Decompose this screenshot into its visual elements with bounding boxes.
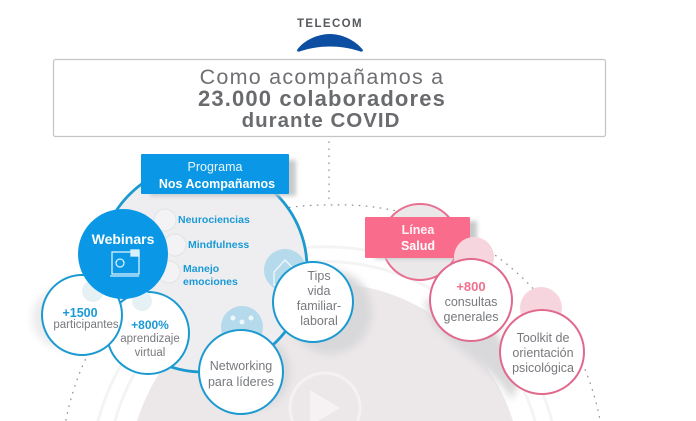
bubble: +800 consultas generales: +800	[456, 279, 486, 294]
title box: 23.000 colaboradores	[198, 86, 446, 111]
bubble: +1500 participantes: +1500	[62, 306, 98, 320]
title box	[54, 60, 606, 136]
bubble: +800% aprendizaje virtual	[107, 291, 189, 374]
bubble: Tips vida familiar-laboral: Tips	[307, 269, 331, 283]
bubble: +800% aprendizaje virtual: virtual	[135, 347, 165, 359]
header: Nos Acompañamos	[159, 177, 275, 191]
topic labels: Manejo	[183, 263, 219, 275]
background: dotted outer arc and connector	[66, 142, 600, 420]
topic labels: Neurociencias	[178, 214, 250, 226]
header shadow	[375, 221, 477, 259]
bubble: Toolkit de orientación psicológica: Toolkit de	[517, 331, 569, 345]
bubble: Tips vida familiar-laboral: familiar-	[297, 299, 341, 313]
bubble: Webinars: Webinars	[92, 231, 155, 247]
background: stippled semicircle	[137, 283, 513, 421]
bubble: +800% aprendizaje virtual: aprendizaje	[120, 333, 180, 345]
header	[141, 154, 289, 194]
background: faint rings and left shading	[32, 247, 552, 421]
bubble: Toolkit de orientación psicológica: psicológica	[512, 361, 574, 375]
header: Salud	[401, 239, 435, 253]
bubble: Tips vida familiar-laboral	[264, 249, 353, 342]
bubble: +1500 participantes: participantes	[53, 319, 119, 331]
header	[365, 217, 470, 258]
bubble: +800 consultas generales	[430, 237, 512, 341]
telecom logo	[297, 18, 363, 52]
header: Línea	[402, 223, 435, 237]
bubble: Toolkit de orientación psicológica	[500, 287, 584, 394]
shadow band behind bubbles	[425, 300, 520, 400]
bubble: +800 consultas generales: generales	[444, 310, 498, 324]
bubble: Toolkit de orientación psicológica: orientación	[512, 346, 574, 360]
topic labels: Mindfulness	[188, 239, 249, 251]
topic icons	[154, 209, 186, 283]
bubble: +800 consultas generales: consultas	[445, 295, 497, 309]
panel: Línea Salud	[365, 204, 584, 400]
bubble: +1500 participantes	[42, 275, 122, 355]
topic labels	[178, 214, 250, 288]
title box: durante COVID	[242, 109, 400, 132]
bubble: Webinars	[78, 209, 168, 299]
bubble: +800% aprendizaje virtual: +800%	[131, 318, 169, 332]
big circle	[99, 164, 307, 372]
telecom logo: TELECOM	[297, 18, 363, 30]
bubble: Networking para líderes: para líderes	[208, 375, 274, 389]
bubble: Tips vida familiar-laboral: vida	[308, 284, 331, 298]
top circle	[382, 204, 458, 280]
topic labels: emociones	[183, 276, 238, 288]
icon: laptop	[110, 250, 139, 276]
bubble: Tips vida familiar-laboral: laboral	[300, 314, 338, 328]
header: Programa	[188, 160, 242, 174]
bubble: Networking para líderes: Networking	[210, 359, 272, 373]
bubble: Networking para líderes	[199, 306, 283, 414]
title box: Como acompañamos a	[200, 65, 444, 89]
header shadow	[150, 160, 296, 196]
panel: Programa Nos Acompañamos	[42, 154, 372, 414]
shadows behind bubbles	[214, 270, 372, 410]
